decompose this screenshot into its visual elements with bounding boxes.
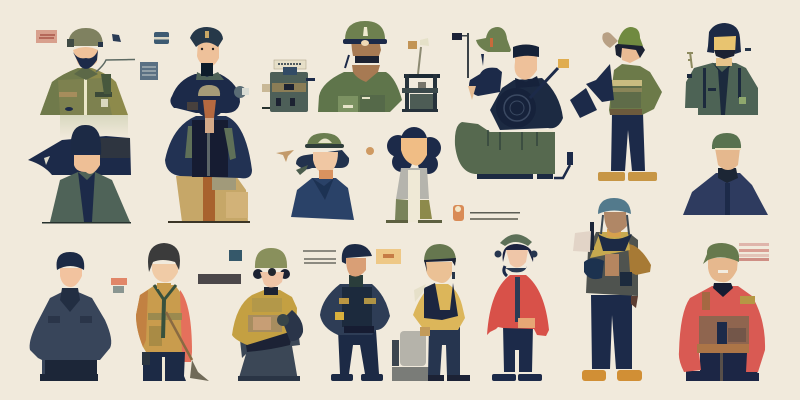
label: red tag top left (36, 30, 57, 43)
icon: blue card (154, 32, 169, 44)
soldier: green helmet, red jacket, brown vest (679, 243, 765, 381)
soldier: large helmet and green jacket (318, 21, 402, 112)
soldier: green helmet, blue coat (683, 133, 768, 215)
soldier: woman with helmet and blue jacket (291, 133, 354, 220)
group: crew behind armoured vehicle with rifle (455, 44, 573, 179)
soldier: olive jacket with bearded face (40, 28, 135, 139)
label: small red and grey tag (111, 278, 127, 293)
soldier: bearded with navy coat and khaki trousers (165, 85, 252, 223)
label: orange badge with text lines (453, 205, 520, 221)
officer: peaked cap and navy jacket (170, 27, 249, 113)
figure: girl with dark curly hair and grey dress (386, 127, 442, 223)
soldier: navy tactical uniform (320, 244, 390, 381)
soldier: green hat, bandolier vest and rifle case (570, 27, 662, 181)
label: red striped text block (739, 243, 769, 261)
equipment: grey machine block (392, 331, 430, 381)
label: text lines and orange tag (303, 249, 401, 264)
machine: field equipment with label (262, 60, 315, 112)
icon: teal tag (229, 250, 242, 261)
icon: green field cap (476, 27, 511, 52)
icon: grey-blue screen panel (140, 62, 158, 80)
icon: navy flag tag (112, 34, 121, 42)
flag post marker (452, 33, 469, 78)
soldier: navy fur hat with rifle (28, 125, 131, 224)
label: dark horizontal bar (198, 274, 241, 284)
soldier: red jacket, headphones (487, 234, 549, 381)
soldier: green helmet, yellow jacket and navy vest (413, 244, 470, 381)
soldier: beanie, yellow jacket, red cloak and broom (136, 243, 209, 381)
machine: tripod equipment with tan marker (402, 38, 440, 112)
soldier: olive helmet, yellow jacket with dark skirt (232, 248, 303, 381)
soldier: navy jacket, plain face (30, 252, 111, 381)
small brown markers (276, 147, 374, 162)
soldier: blue helmet, brown sleeve, tall with orange boots (573, 198, 651, 381)
soldier: navy headset helmet with green vest (685, 23, 758, 115)
